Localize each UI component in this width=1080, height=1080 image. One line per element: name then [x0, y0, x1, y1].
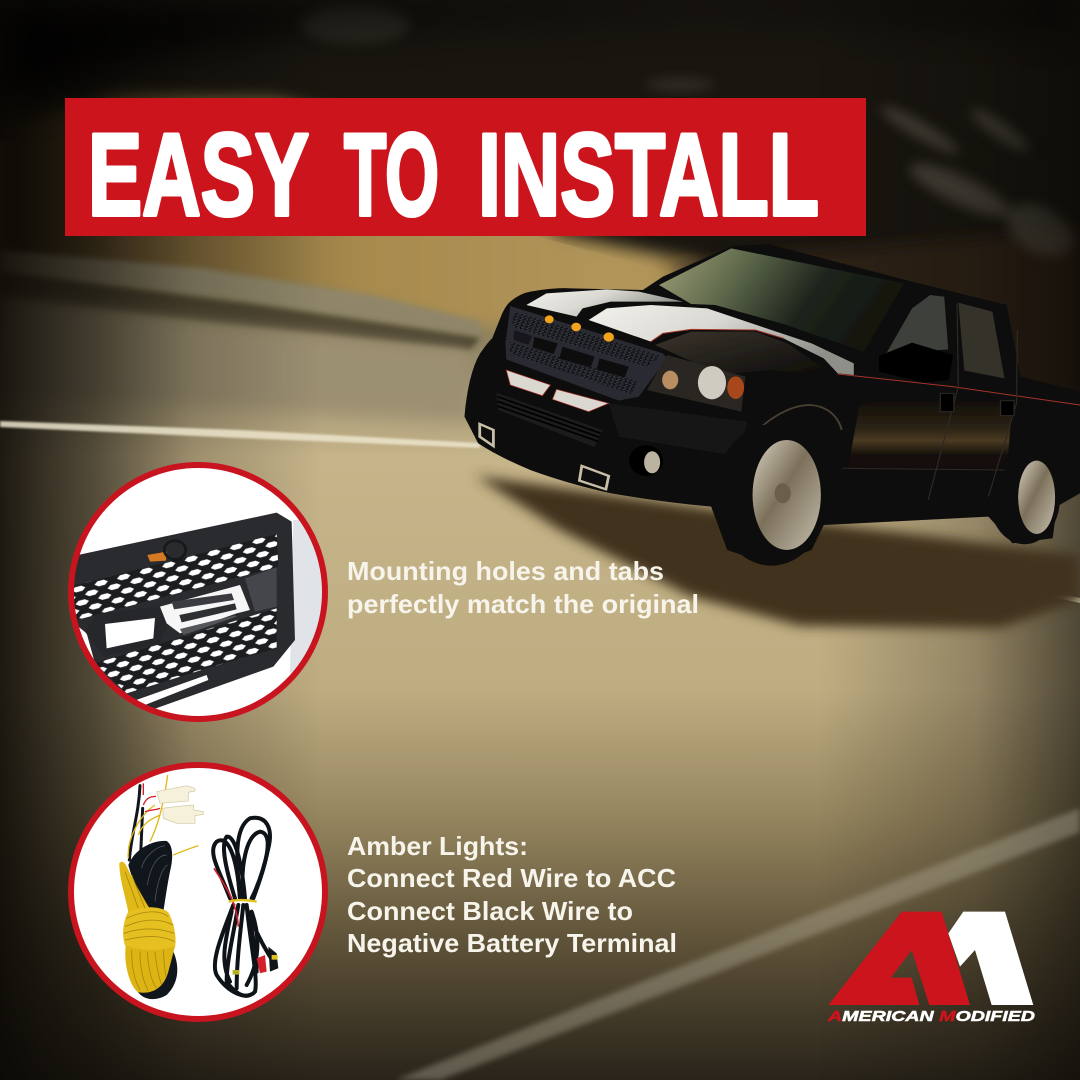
rear wheel [989, 452, 1060, 544]
centre badge [85, 614, 98, 635]
caption: mounting holes: perfectly match the original [347, 589, 699, 619]
fog light [629, 445, 663, 476]
lower bumper intake [496, 393, 603, 447]
grille frame [70, 513, 295, 712]
hood gloss [655, 332, 836, 377]
front side window [886, 295, 948, 354]
red pinstripe [651, 329, 1080, 405]
front bumper gloss [609, 403, 747, 457]
inset photo: wiring harnesses [71, 765, 325, 1019]
logo mark [828, 912, 1033, 1005]
logo: American Modified [827, 912, 1035, 1025]
black cable bundle behind yellow wire [128, 786, 177, 999]
grille [505, 306, 667, 401]
windshield [659, 248, 904, 352]
black harness bundle [213, 818, 273, 996]
door panels with reflection [842, 397, 1013, 502]
upper honeycomb mesh [70, 534, 278, 620]
yellow wire coil [119, 775, 198, 993]
red ring [71, 465, 325, 719]
caption: amber lights wiring: Connect Black Wire to [347, 896, 633, 926]
pickup truck with amber-light grille [464, 244, 1080, 566]
door lines and handles [842, 303, 1017, 500]
light backdrop on right [290, 520, 322, 674]
heading text: TO [344, 109, 439, 240]
heading text [88, 109, 819, 240]
logo wordmark: AMERICAN M ODIFIED [827, 1008, 1035, 1025]
lower slot [136, 675, 208, 704]
white connectors [157, 786, 203, 823]
headlight [647, 355, 745, 412]
rear side window [958, 303, 1004, 378]
amber marker lights [545, 315, 614, 342]
red ring [71, 765, 325, 1019]
heading text: EASY [88, 109, 309, 240]
caption: mounting holes: Mounting holes and tabs [347, 556, 664, 586]
heading banner [65, 98, 866, 240]
lower honeycomb mesh [95, 608, 277, 693]
yellow tie [229, 900, 257, 902]
truck body silhouette [464, 244, 1080, 565]
amber connector [147, 552, 167, 562]
truck shadow on road [476, 476, 1080, 628]
centre bar cut-outs [160, 585, 250, 633]
fender highlights [739, 405, 842, 453]
caption: amber lights wiring [347, 831, 677, 958]
badge window [105, 618, 155, 648]
side mirror [879, 343, 953, 383]
chrome bumper inserts [506, 370, 609, 412]
tow hooks [480, 424, 609, 489]
caption: amber lights wiring: Negative Battery Terminal [347, 928, 677, 958]
front wheel [715, 424, 828, 566]
caption: amber lights wiring: Connect Red Wire to ACC [347, 863, 676, 893]
caption: mounting holes [347, 556, 699, 619]
harness connectors [233, 947, 278, 975]
red wire [214, 868, 238, 927]
heading text: INSTALL [478, 109, 819, 240]
caption: amber lights wiring: Amber Lights: [347, 831, 528, 861]
inset photo: grille [70, 465, 327, 719]
hood white stripes [526, 289, 854, 375]
